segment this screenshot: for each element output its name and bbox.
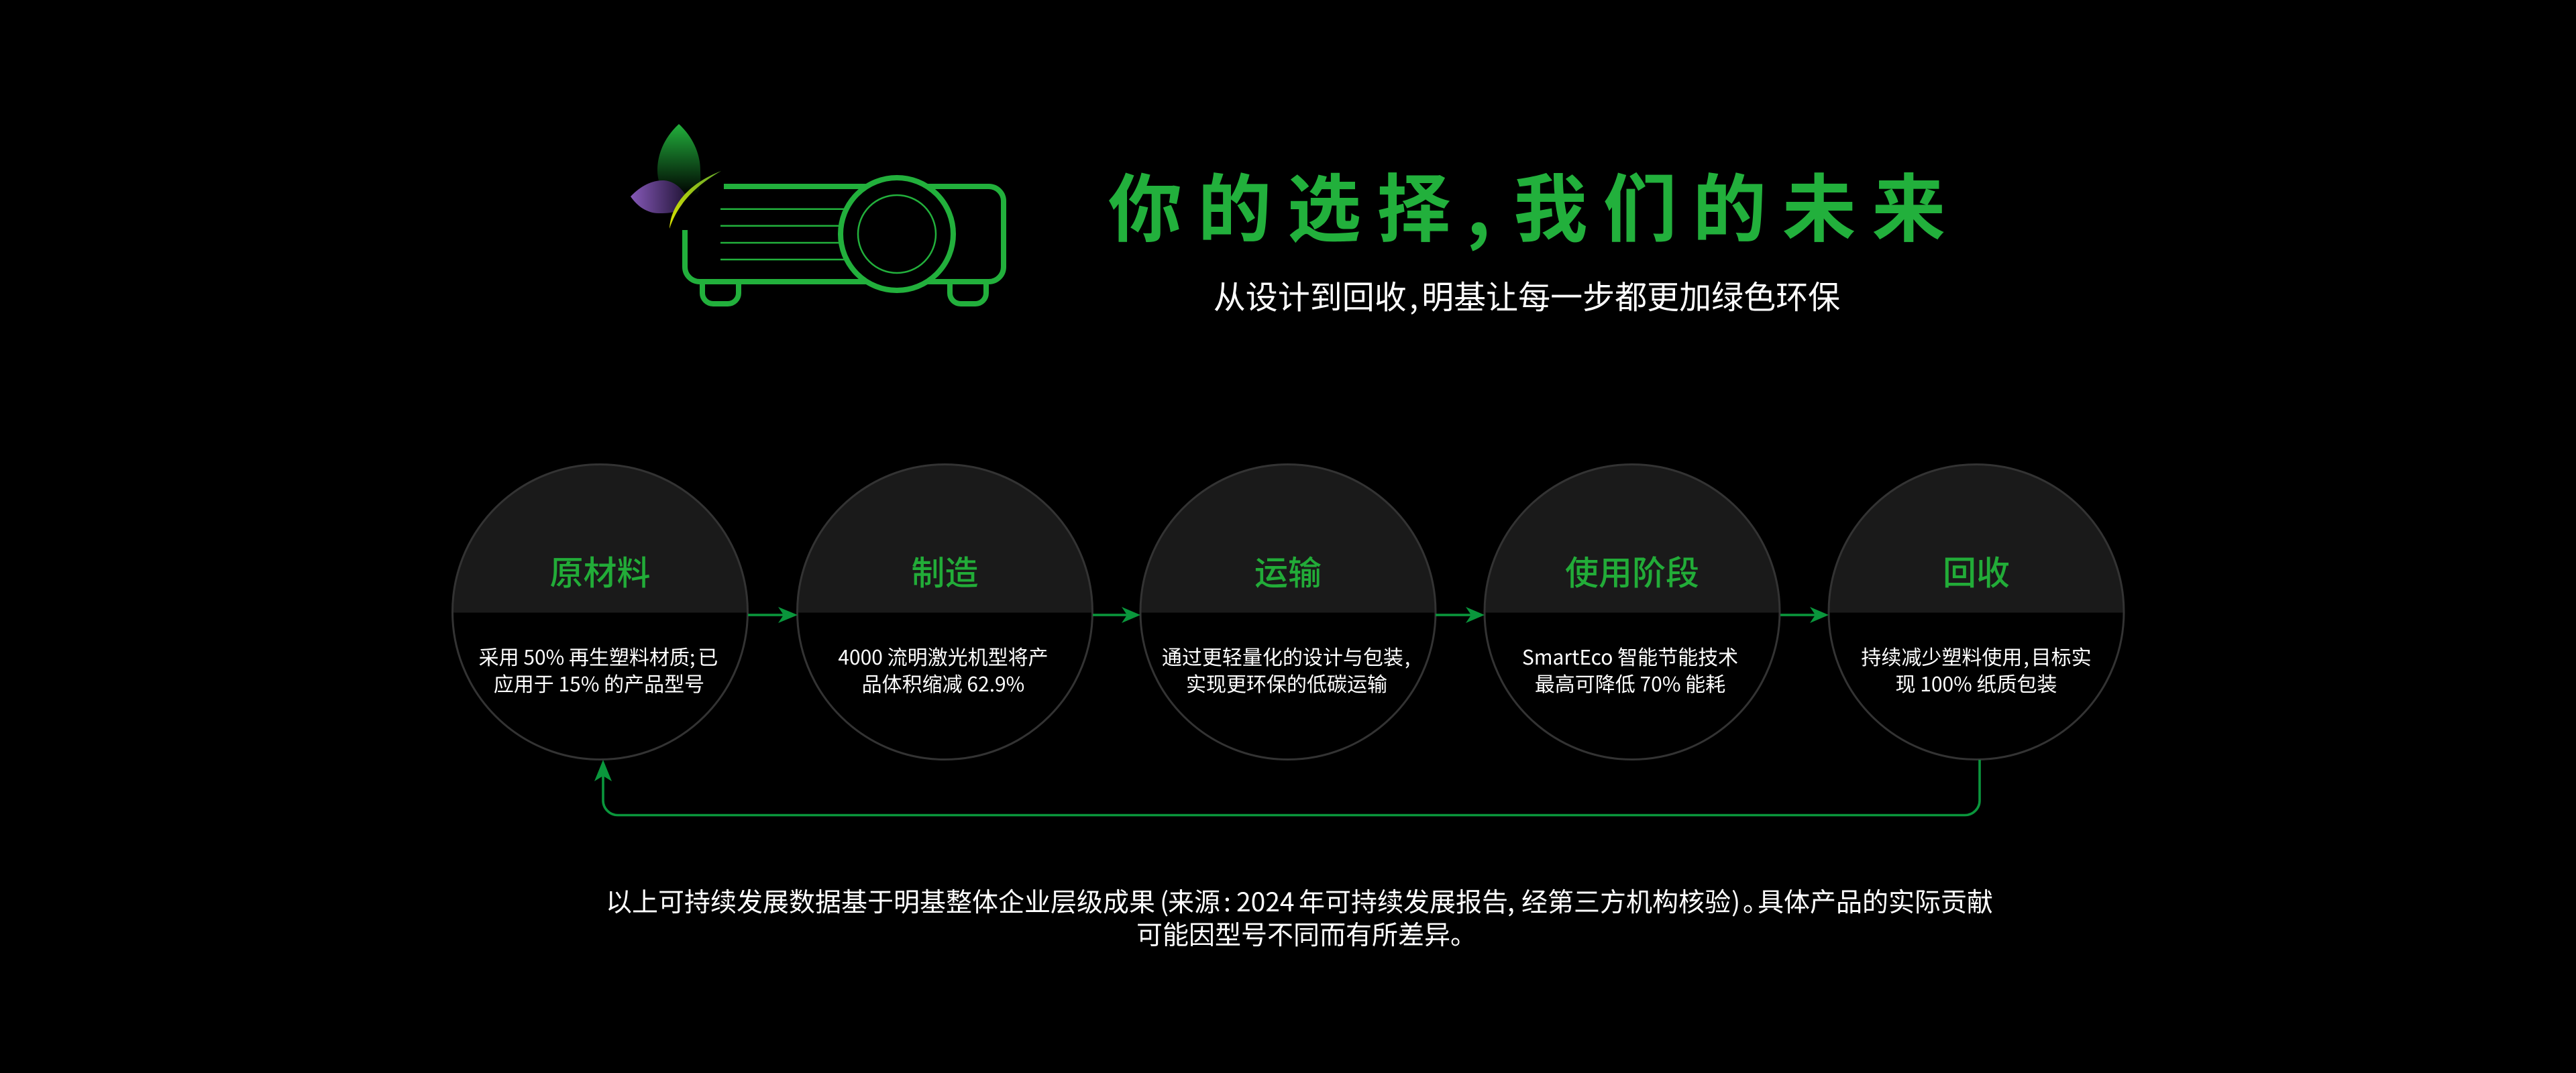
- arrow: 使用阶段 to 回收: [1780, 607, 1829, 623]
- text block: 采用 50% 再生塑料材质;已: [479, 641, 718, 671]
- panel: 原材料: [452, 464, 747, 759]
- panel: 制造: [797, 464, 1092, 759]
- panel: 使用阶段: [1485, 464, 1780, 759]
- arrow: 回收 back to 原材料: [594, 760, 1980, 815]
- text block: 品体积缩减 62.9%: [862, 668, 1024, 697]
- title: 你的选择,我们的未来: [1108, 150, 1962, 257]
- footnote: 来源: [1168, 882, 1220, 919]
- footnote: 可能因型号不同而有所差异。: [1136, 915, 1477, 952]
- icon: projector body: [685, 186, 1004, 282]
- footnote: 经第三方机构核验: [1521, 882, 1731, 919]
- text block: 通过更轻量化的设计与包装,: [1162, 641, 1410, 671]
- footnote: [606, 882, 1993, 952]
- icon: projector right foot: [950, 282, 986, 304]
- icon: projector with leaves: [631, 124, 1004, 304]
- text block: 应用于 15% 的产品型号: [494, 668, 704, 697]
- footnote: ,: [1507, 882, 1515, 919]
- icon: purple leaf: [631, 180, 685, 213]
- panel: 运输: [1140, 464, 1436, 759]
- icon: projector lens: [841, 178, 953, 290]
- footnote: 。: [1743, 882, 1769, 919]
- footnote: :: [1224, 882, 1231, 919]
- text block: SmartEco 智能节能技术: [1522, 641, 1738, 671]
- text block: 4000 流明激光机型将产: [838, 641, 1049, 671]
- text block: 现 100% 纸质包装: [1895, 668, 2057, 697]
- footnote: 年可持续发展报告: [1299, 882, 1508, 919]
- footnote: ): [1731, 882, 1740, 919]
- subtitle: 从设计到回收,明基让每一步都更加绿色环保: [1214, 271, 1840, 318]
- arrow: 原材料 to 制造: [748, 607, 798, 623]
- icon: projector left foot: [702, 282, 739, 304]
- text block: 持续减少塑料使用,目标实: [1861, 641, 2092, 671]
- icon: projector vents: [720, 209, 852, 260]
- heading: 原材料: [550, 547, 651, 595]
- text block: 最高可降低 70% 能耗: [1535, 668, 1725, 697]
- icon: green leaf: [657, 124, 700, 209]
- heading: 使用阶段: [1565, 547, 1699, 595]
- footnote: (: [1160, 882, 1169, 919]
- footnote: 2024: [1236, 882, 1300, 919]
- panel: 回收: [1829, 464, 2124, 759]
- heading: 运输: [1254, 547, 1322, 595]
- arrow: 运输 to 使用阶段: [1436, 607, 1485, 623]
- heading: 制造: [911, 547, 978, 595]
- arrow: 制造 to 运输: [1093, 607, 1140, 623]
- heading: 回收: [1943, 547, 2010, 595]
- footnote: 以上可持续发展数据基于明基整体企业层级成果: [606, 882, 1155, 919]
- icon: lime swoosh: [669, 171, 721, 229]
- footnote: 具体产品的实际贡献: [1758, 882, 1993, 919]
- text block: 实现更环保的低碳运输: [1186, 668, 1387, 697]
